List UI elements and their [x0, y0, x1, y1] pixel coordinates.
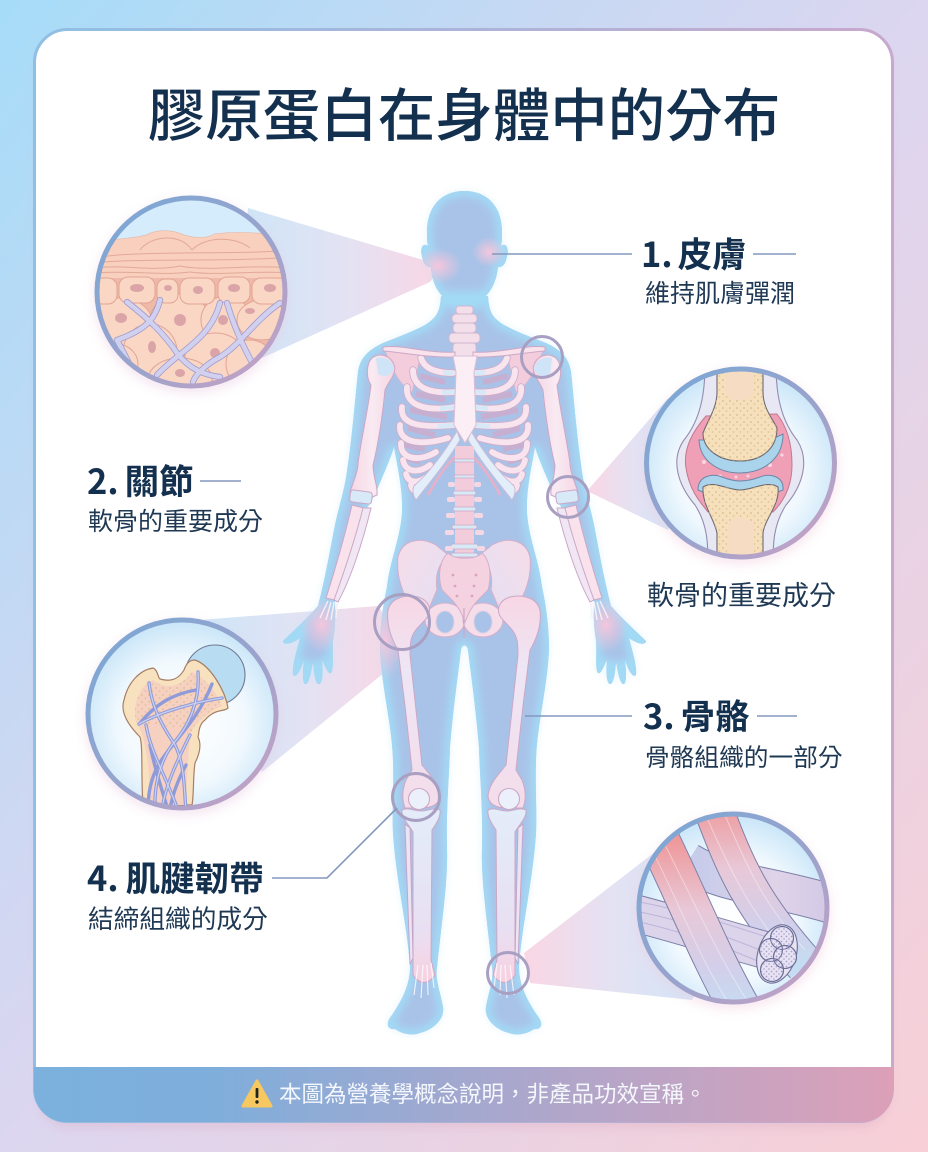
horizontal tendon bundle	[630, 912, 772, 952]
panel: joint magnified circle	[642, 360, 838, 568]
label 4: tendons and ligaments	[87, 808, 397, 936]
label 2: joints: 2.關節	[87, 454, 194, 504]
skin layers	[111, 230, 282, 357]
label 2: joints: 軟骨的重要成分	[88, 502, 263, 538]
human body figure	[283, 191, 646, 1034]
disclaimer: 本圖為營養學概念說明，非產品功效宣稱。	[279, 1077, 707, 1109]
collagen fibers	[117, 300, 280, 382]
upper bone	[703, 360, 777, 461]
label 3: bone: 骨骼組織的一部分	[645, 738, 843, 774]
rear tendon	[688, 862, 835, 905]
label 1: skin: 維持肌膚彈潤	[645, 274, 795, 310]
front pink tendon	[660, 842, 742, 1012]
label 4: tendons and ligaments: 4.肌腱韌帶	[87, 851, 264, 901]
fibre cross section	[756, 924, 798, 984]
joint capsule	[676, 374, 804, 552]
cartilage	[699, 434, 783, 473]
panel: tendon magnified circle	[630, 805, 835, 1012]
footer bar	[34, 1067, 893, 1122]
upper pink tendon	[712, 805, 805, 965]
spine	[445, 446, 485, 558]
label 2: joints	[87, 454, 263, 538]
joint rings	[374, 336, 588, 994]
callout beam: tendon	[524, 852, 720, 1000]
skeleton	[320, 306, 608, 998]
panel: skin magnified circle	[88, 198, 290, 402]
sternum	[453, 356, 477, 443]
label 1: skin: 1.皮膚	[641, 227, 747, 277]
callout beam: bone	[200, 606, 402, 772]
panel: bone magnified circle	[84, 620, 280, 816]
trabecular lattice	[139, 672, 222, 810]
caption: joint circle: 軟骨的重要成分	[647, 574, 836, 613]
vertebrae: neck	[449, 306, 480, 356]
label 4: tendons and ligaments: 結締組織的成分	[88, 899, 268, 936]
femur	[123, 660, 228, 805]
label 1: skin	[492, 227, 796, 310]
lower bone	[702, 484, 779, 554]
cells	[100, 276, 282, 384]
callout beam: joint	[587, 398, 690, 530]
label 3: bone	[525, 689, 843, 774]
callout beam: skin	[240, 208, 440, 358]
sacrum	[440, 553, 490, 622]
icon: warning	[243, 1081, 271, 1106]
label 3: bone: 3.骨骼	[643, 689, 750, 739]
femoral head cartilage	[185, 645, 245, 705]
title: 膠原蛋白在身體中的分布	[148, 69, 780, 153]
